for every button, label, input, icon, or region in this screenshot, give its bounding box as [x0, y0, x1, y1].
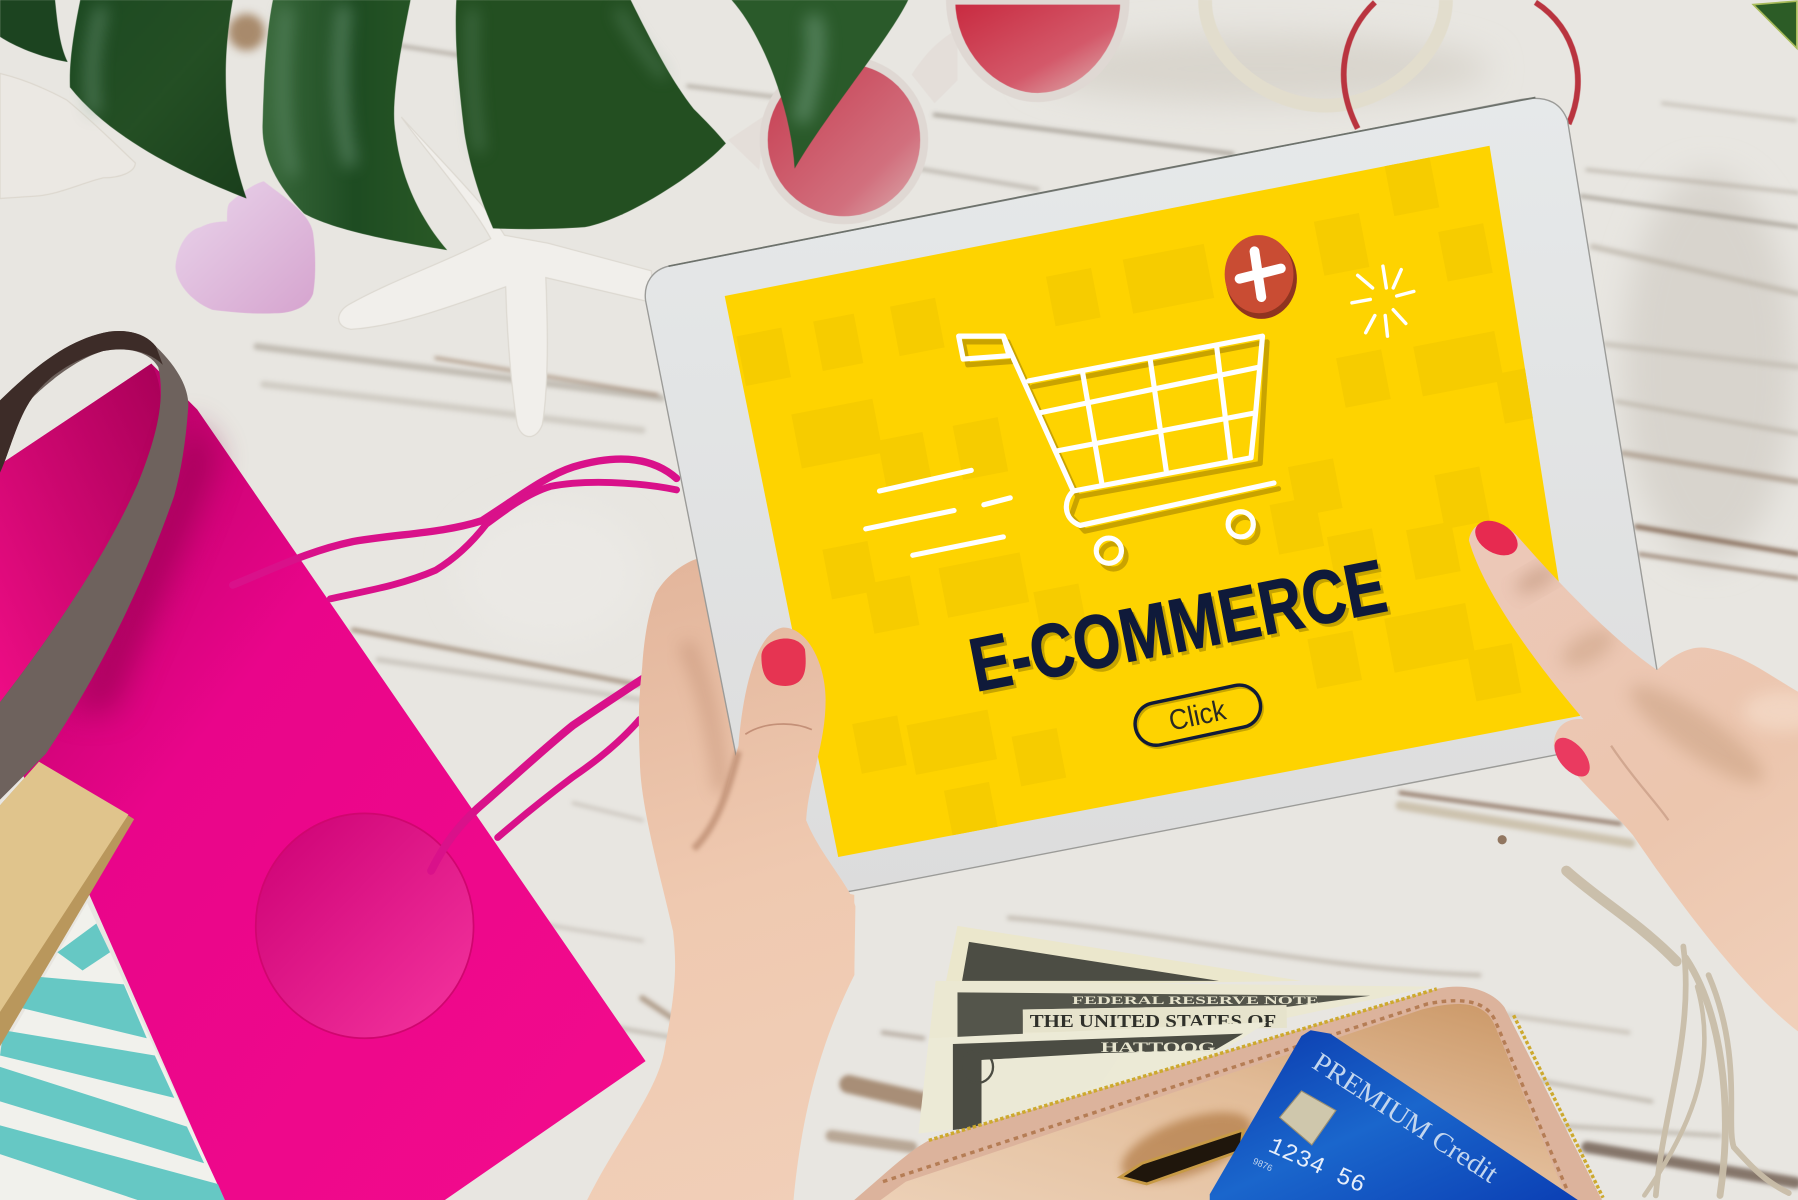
clear bracelet	[1205, 0, 1446, 106]
tablet	[645, 98, 1663, 906]
tan box	[0, 762, 134, 1046]
pink crystal heart	[175, 181, 315, 313]
leaf 1	[70, 0, 247, 198]
left lens	[764, 60, 924, 220]
leaf highlights	[92, 11, 816, 172]
shopping cart icon	[959, 336, 1274, 563]
red plus badge	[1225, 235, 1297, 319]
red bracelet	[1344, 2, 1578, 128]
thumb crease	[745, 724, 812, 734]
screen checker pattern	[736, 153, 1536, 840]
front bill	[918, 1022, 1267, 1133]
card chip	[1280, 1091, 1336, 1145]
shell top left	[0, 73, 135, 198]
cart wheels	[1096, 538, 1121, 563]
middle bill	[929, 981, 1432, 1041]
E-COMMERCE heading: E-COMMERCE	[966, 547, 1397, 712]
basket rails	[1039, 367, 1259, 451]
leaf 4	[732, 0, 908, 169]
left hand palm and fingers	[587, 559, 854, 1200]
pink rope handles	[233, 459, 677, 871]
dollar bills	[918, 926, 1432, 1133]
motion lines	[866, 470, 1010, 555]
top right leaf tip	[1753, 1, 1797, 48]
index finger nail	[1469, 514, 1524, 562]
right lens	[951, 0, 1125, 98]
tassel	[1566, 871, 1789, 1195]
tablet top edge	[669, 98, 1535, 266]
left hand thumb	[688, 628, 855, 1055]
cart basket	[1029, 336, 1262, 491]
leaf 2	[263, 0, 447, 250]
gold zip wallet	[854, 987, 1603, 1200]
thumb nail	[761, 639, 806, 686]
yellow screen	[725, 146, 1580, 857]
finger crease	[1611, 746, 1668, 820]
pink sunglasses	[728, 0, 1125, 220]
white starfish	[339, 117, 654, 437]
card small digits: 9876	[1251, 1156, 1274, 1173]
cart icon shadow	[963, 342, 1279, 569]
united states text: THE UNITED STATES OF	[1030, 1011, 1276, 1031]
bag handle strap	[0, 331, 188, 800]
sparkle icon	[1352, 266, 1414, 336]
back bill	[945, 926, 1301, 987]
sunglasses bridge and frame	[728, 29, 957, 170]
pink shopping bag	[0, 364, 646, 1200]
bag round tag	[256, 813, 474, 1038]
blue credit card	[1210, 1030, 1578, 1200]
leaf 0	[0, 0, 68, 62]
tablet body	[645, 98, 1663, 906]
dollar text: HATTOOG	[1101, 1040, 1216, 1056]
click button	[1131, 681, 1266, 751]
hand shading	[1512, 560, 1798, 797]
cart frame	[1003, 336, 1274, 525]
card number: 1234 56	[1264, 1133, 1369, 1200]
palm crease shadow	[686, 642, 722, 792]
bag inner panel	[0, 364, 161, 702]
click button: Click	[1166, 694, 1229, 738]
teal stripes	[0, 924, 225, 1200]
middle finger nail	[1548, 731, 1597, 783]
bag shadow by strap	[69, 419, 218, 711]
federal reserve text: FEDERAL RESERVE NOTE	[1072, 995, 1319, 1007]
leaf 3	[456, 0, 726, 229]
E-COMMERCE heading: E-COMMERCE	[963, 544, 1393, 708]
right hand	[1469, 514, 1798, 1031]
card name: PREMIUM Credit	[1307, 1046, 1504, 1189]
striped teal paper	[0, 903, 225, 1200]
monstera leaves	[0, 0, 1797, 250]
thumb web shadow	[694, 751, 738, 849]
cart handle	[959, 336, 1009, 359]
wallet clasp	[1120, 1130, 1243, 1184]
